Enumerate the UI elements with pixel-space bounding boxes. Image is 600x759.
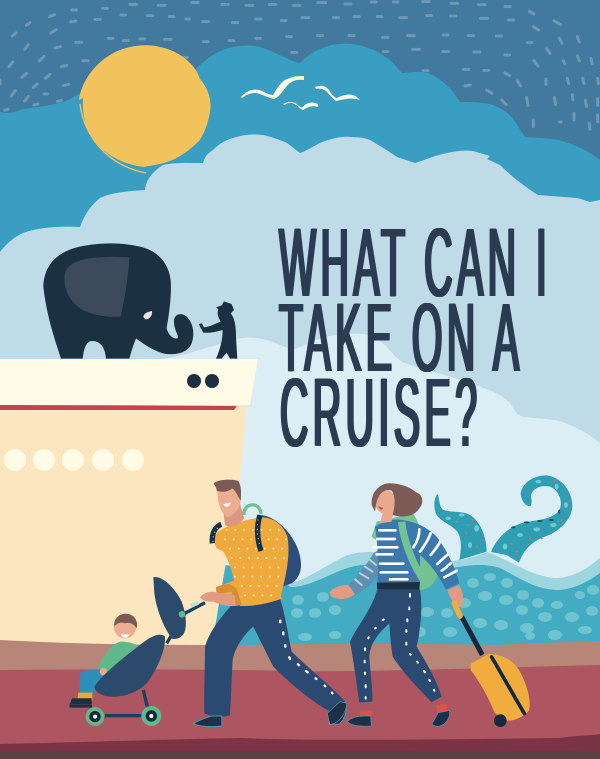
left arm (348, 550, 380, 595)
wave body (212, 564, 600, 650)
left hand (329, 585, 355, 599)
suitcase handle (462, 617, 482, 655)
right tentacle (491, 475, 572, 563)
title line 2: TAKE ON A (279, 283, 524, 392)
shoes (327, 702, 450, 726)
green backpack (372, 513, 438, 590)
stroller handle (191, 603, 198, 606)
hair (214, 480, 241, 501)
hand (200, 592, 235, 606)
neck (223, 503, 244, 526)
shoes (193, 702, 346, 727)
suitcase grip (454, 603, 460, 616)
ankles (360, 703, 448, 717)
suitcase wheel (494, 714, 507, 727)
ocean waves (212, 552, 600, 650)
ship hull (0, 405, 247, 645)
trousers (204, 598, 345, 717)
title line 1: WHAT CAN I (279, 208, 551, 317)
trouser piping (365, 594, 434, 699)
right hand (447, 585, 463, 607)
sleeve cuff (216, 584, 242, 606)
kerb (0, 734, 600, 759)
sweater (375, 520, 459, 589)
birds (241, 76, 360, 110)
wave crest (280, 552, 600, 650)
mouth (223, 503, 231, 507)
child (69, 614, 139, 708)
sweater stripes (373, 529, 457, 579)
red stripe (0, 405, 237, 410)
sweater dots (225, 530, 287, 595)
face (217, 487, 241, 517)
sand band (0, 640, 600, 680)
sky dash pattern left (0, 3, 300, 110)
stroller wheels (86, 706, 161, 726)
elephant (43, 243, 193, 359)
woman with suitcase (327, 483, 530, 727)
suitcase (471, 654, 530, 721)
stroller seat (94, 635, 165, 697)
left sleeve stripes (355, 560, 376, 585)
trousers (350, 589, 442, 703)
road base (0, 751, 600, 759)
cloud: dark blue layer (0, 44, 600, 300)
ground (0, 640, 600, 759)
sky dash pattern right (302, 2, 598, 129)
belt (377, 582, 420, 590)
backpack handle (244, 505, 261, 515)
ship deck (0, 359, 258, 405)
face and neck (375, 490, 395, 523)
cloud: light blue layer (0, 134, 600, 560)
anchor holes (187, 374, 219, 388)
sweater (214, 517, 289, 606)
elephant eye (143, 311, 152, 319)
left tentacle (434, 494, 487, 560)
cloud: pale layer (135, 334, 600, 650)
stroller frame (105, 603, 205, 716)
smile (378, 506, 383, 510)
backpack strap (402, 522, 425, 582)
road (0, 665, 600, 745)
water bubbles (291, 573, 599, 641)
stroller joint (179, 611, 185, 618)
elephant ear (64, 257, 129, 317)
sweater forearm (216, 580, 242, 606)
title line 3: CRUISE? (280, 358, 481, 467)
straps (212, 515, 261, 551)
zookeeper silhouette (199, 301, 237, 359)
hair (372, 483, 422, 516)
stroller and child (69, 577, 205, 726)
trouser piping (280, 621, 332, 693)
sun (79, 45, 211, 173)
strap dots (213, 520, 261, 547)
suitcase stripe (492, 657, 524, 714)
man with backpack (193, 480, 346, 727)
tentacles (434, 475, 572, 563)
portholes (4, 449, 144, 471)
backpack (257, 515, 301, 587)
stroller hood (153, 577, 186, 639)
ship (0, 359, 258, 645)
